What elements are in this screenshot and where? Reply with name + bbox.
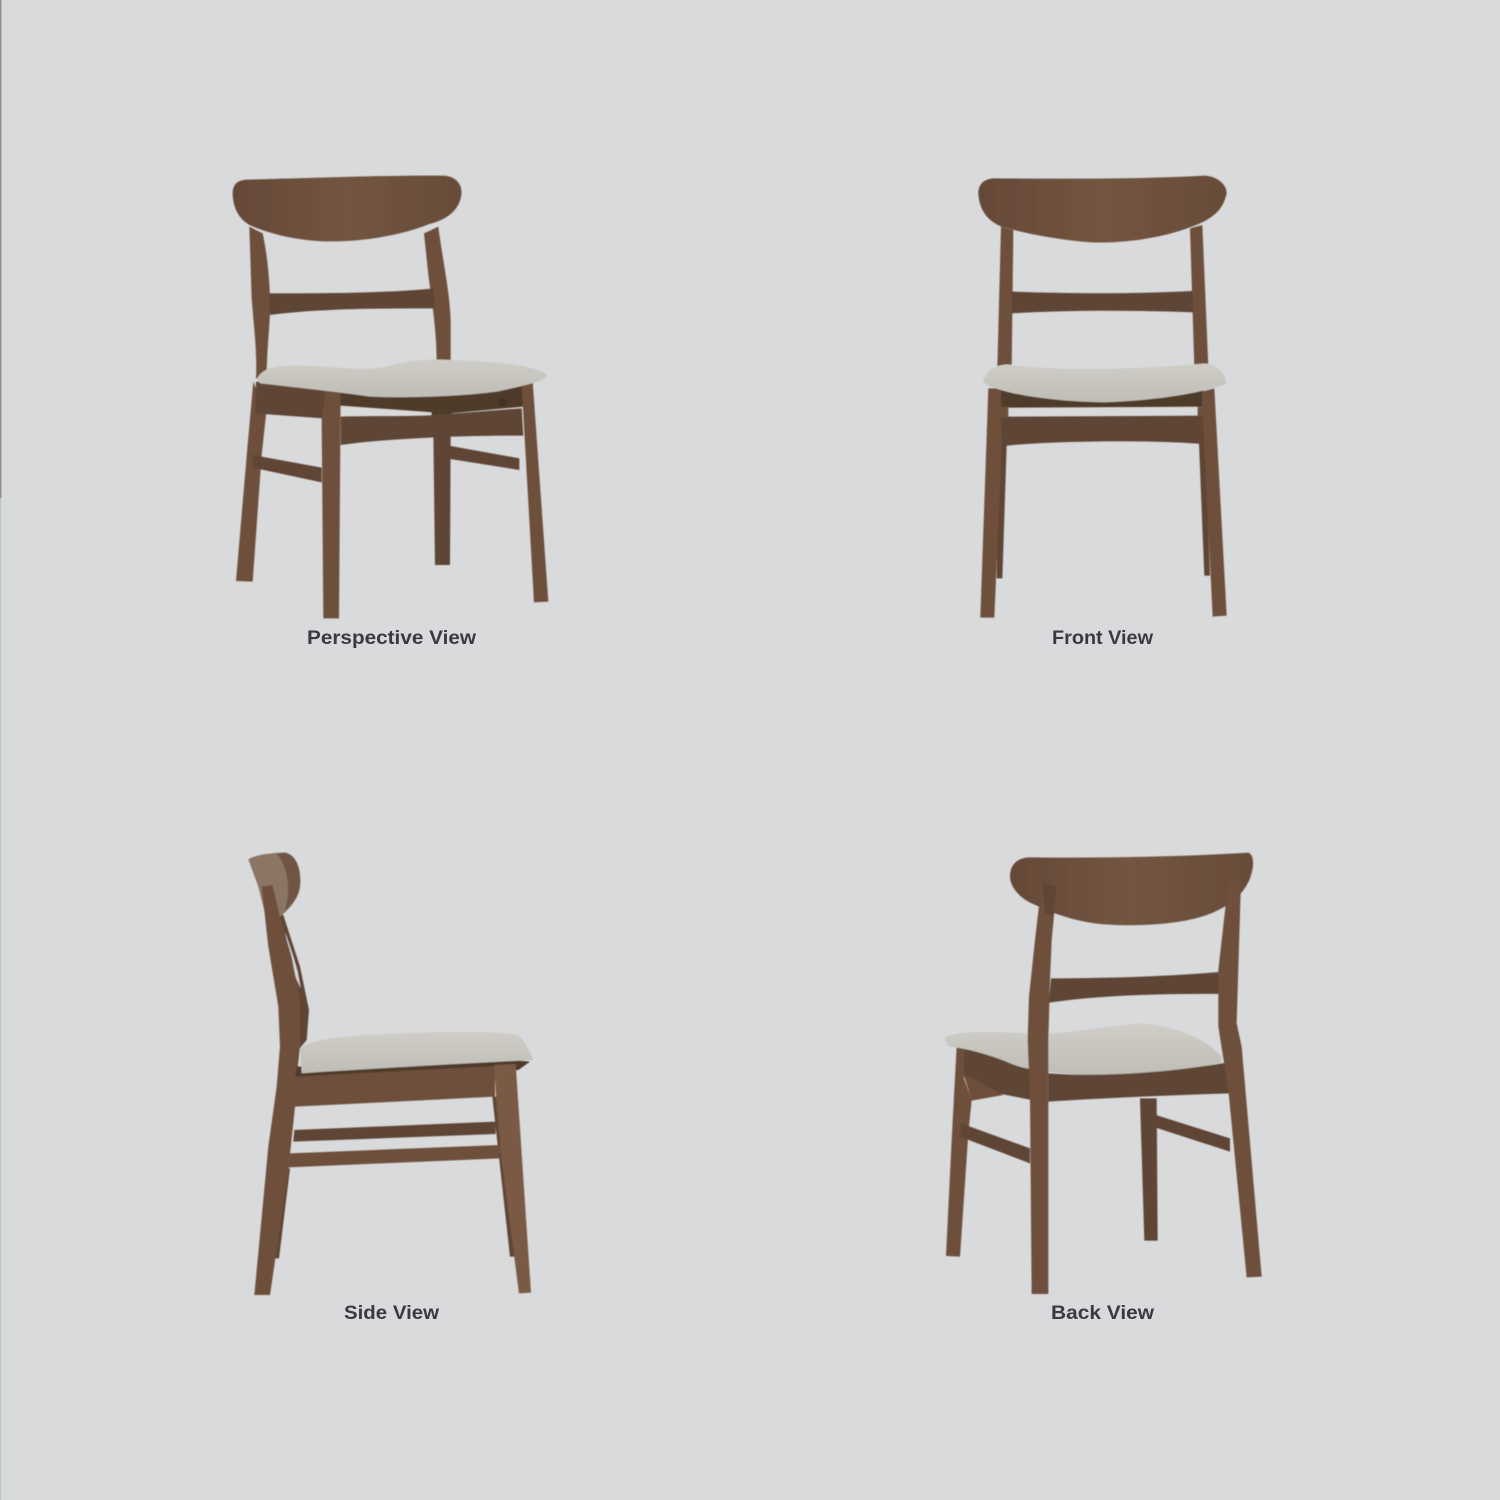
label: front view: Front View — [1052, 627, 1154, 649]
label: perspective view: Perspective View — [307, 627, 477, 649]
backrest — [233, 176, 461, 241]
chair: back view — [944, 853, 1262, 1294]
seat cushion — [983, 363, 1226, 402]
seat cushion — [944, 1023, 1222, 1076]
panel: side view — [248, 853, 533, 1324]
panel: back view — [944, 853, 1262, 1324]
backrest — [978, 176, 1227, 242]
seat cushion — [300, 1032, 533, 1073]
label: side view: Side View — [344, 1302, 440, 1324]
panel: front view — [978, 176, 1227, 649]
backrest — [1010, 853, 1253, 925]
panel: perspective view — [233, 176, 548, 649]
chair: side view — [248, 853, 533, 1295]
chair: perspective view — [233, 176, 548, 618]
seat cushion — [257, 360, 547, 397]
backrail — [1049, 972, 1224, 1003]
chair: front view — [978, 176, 1227, 618]
label: back view: Back View — [1051, 1302, 1155, 1324]
backrail — [269, 288, 435, 315]
backrest edge — [248, 853, 300, 927]
backrail — [1012, 291, 1193, 313]
